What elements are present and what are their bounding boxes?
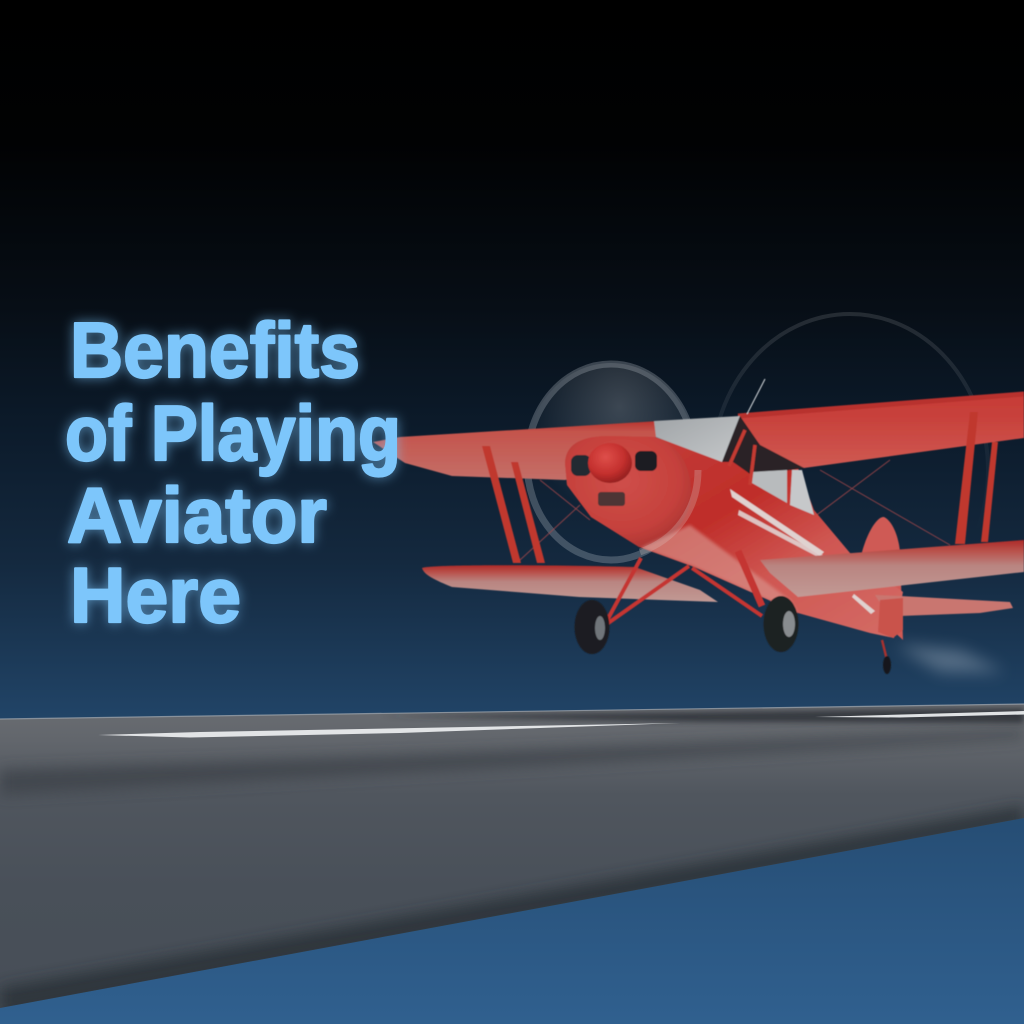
runway centre line far	[815, 711, 1024, 718]
large faint propeller ring	[712, 314, 988, 626]
bracing wires	[520, 460, 950, 560]
rear fuselage tip	[878, 598, 903, 638]
exhaust smoke trail	[895, 645, 1005, 672]
antenna	[747, 379, 765, 414]
biplane	[373, 379, 1024, 674]
propeller disc	[525, 363, 697, 561]
cockpit struts	[729, 430, 755, 485]
title line 4: Here	[70, 551, 241, 639]
title line 2: of Playing	[65, 389, 401, 477]
left wheel	[574, 600, 610, 654]
cockpit side frame	[722, 416, 804, 474]
left engine intake	[571, 455, 591, 476]
nose spinner	[588, 443, 632, 483]
title: Benefits of Playing Aviator Here	[65, 306, 401, 639]
right wheel	[764, 596, 798, 652]
runway	[0, 704, 1024, 1016]
tail wheel	[882, 640, 891, 674]
lower wing left	[422, 565, 718, 602]
fuselage	[565, 436, 903, 638]
right engine intake	[635, 451, 657, 471]
tailplane	[875, 595, 1013, 616]
landing gear	[604, 551, 762, 626]
top wing left	[373, 421, 659, 480]
tail fin	[860, 517, 903, 640]
belly shading	[640, 525, 798, 613]
top wing right	[738, 392, 1024, 468]
left wing struts	[482, 446, 545, 563]
cockpit side window	[752, 470, 787, 503]
title line 3: Aviator	[67, 471, 327, 559]
cowling	[565, 436, 691, 547]
title line 1: Benefits	[70, 306, 360, 394]
cockpit windscreen	[654, 416, 740, 462]
runway centre line near	[98, 723, 680, 738]
right wing struts	[955, 412, 998, 544]
lower air vent	[598, 492, 625, 506]
runway edge highlight	[0, 704, 1024, 719]
propeller ring front arc	[640, 470, 698, 552]
fuselage white stripes	[730, 489, 875, 614]
cockpit rear window	[790, 470, 814, 515]
lower wing right	[760, 540, 1024, 597]
top wing leading edge	[738, 394, 1024, 416]
